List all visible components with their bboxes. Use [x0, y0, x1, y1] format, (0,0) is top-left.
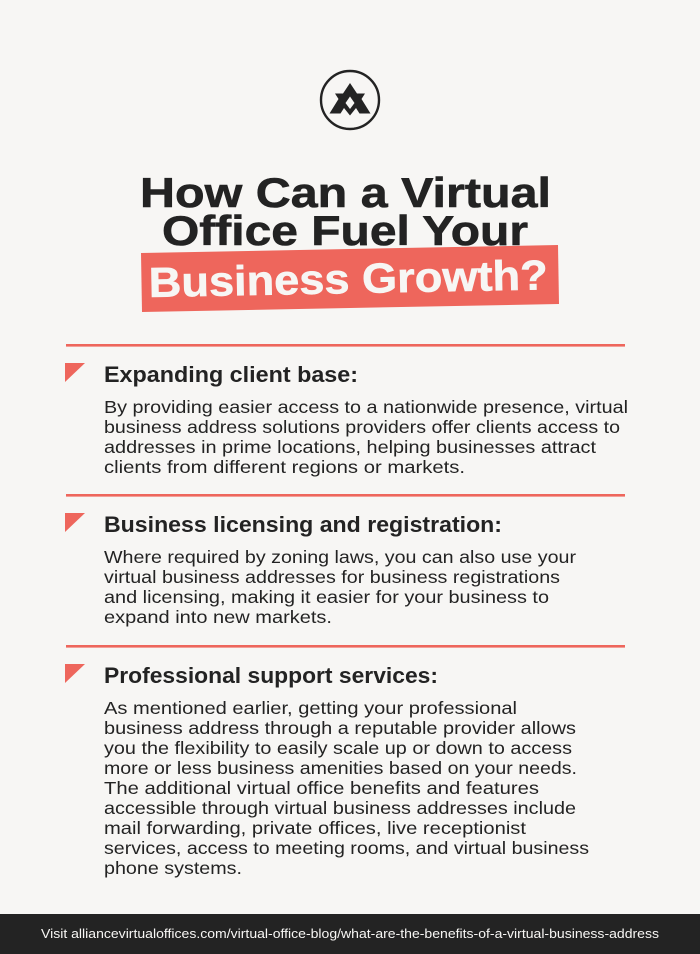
panel: expanding client base: clients from different regions or markets. [104, 457, 465, 477]
panel: professional support services: you the flexibility to easily scale up or down to access [104, 738, 572, 758]
title [140, 169, 551, 254]
panel: professional support services: more or less business amenities based on your needs. [104, 758, 577, 778]
panel: professional support services: As mentioned earlier, getting your professional [104, 698, 517, 718]
panel: business licensing and registration: and licensing, making it easier for your business to [104, 587, 549, 607]
highlighted title banner: Business Growth? [148, 251, 548, 306]
panel: professional support services: phone systems. [104, 858, 242, 878]
footer [0, 914, 700, 954]
title: Office Fuel Your [162, 207, 528, 254]
panel: expanding client base: addresses in prime locations, helping businesses attract [104, 437, 596, 457]
icon: logo [321, 71, 379, 129]
panel: professional support services [65, 645, 625, 878]
title: How Can a Virtual [140, 169, 551, 216]
panel: professional support services: mail forwarding, private offices, live receptionist [104, 818, 526, 838]
panel: professional support services: services, access to meeting rooms, and virtual business [104, 838, 589, 858]
panel: expanding client base: business address solutions providers offer clients access to [104, 417, 620, 437]
panel: business licensing and registration: Business licensing and registration: [104, 512, 502, 537]
panel: professional support services: The additional virtual office benefits and features [104, 778, 539, 798]
panel: expanding client base [65, 344, 628, 477]
panel: business licensing and registration [65, 494, 625, 627]
panel: professional support services: business address through a reputable provider allows [104, 718, 576, 738]
panel: business licensing and registration: Where required by zoning laws, you can also use your [104, 547, 576, 567]
panel: professional support services: accessible through virtual business addresses include [104, 798, 576, 818]
panel: expanding client base: Expanding client base: [104, 362, 358, 387]
panel: business licensing and registration: expand into new markets. [104, 607, 332, 627]
panel: professional support services: Professional support services: [104, 663, 438, 688]
footer: Visit alliancevirtualoffices.com/virtual-office-blog/what-are-the-benefits-of-a-virtual-business-address [41, 927, 659, 941]
panel: business licensing and registration: virtual business addresses for business registrations [104, 567, 560, 587]
panel: expanding client base: By providing easier access to a nationwide presence, virtual [104, 397, 628, 417]
